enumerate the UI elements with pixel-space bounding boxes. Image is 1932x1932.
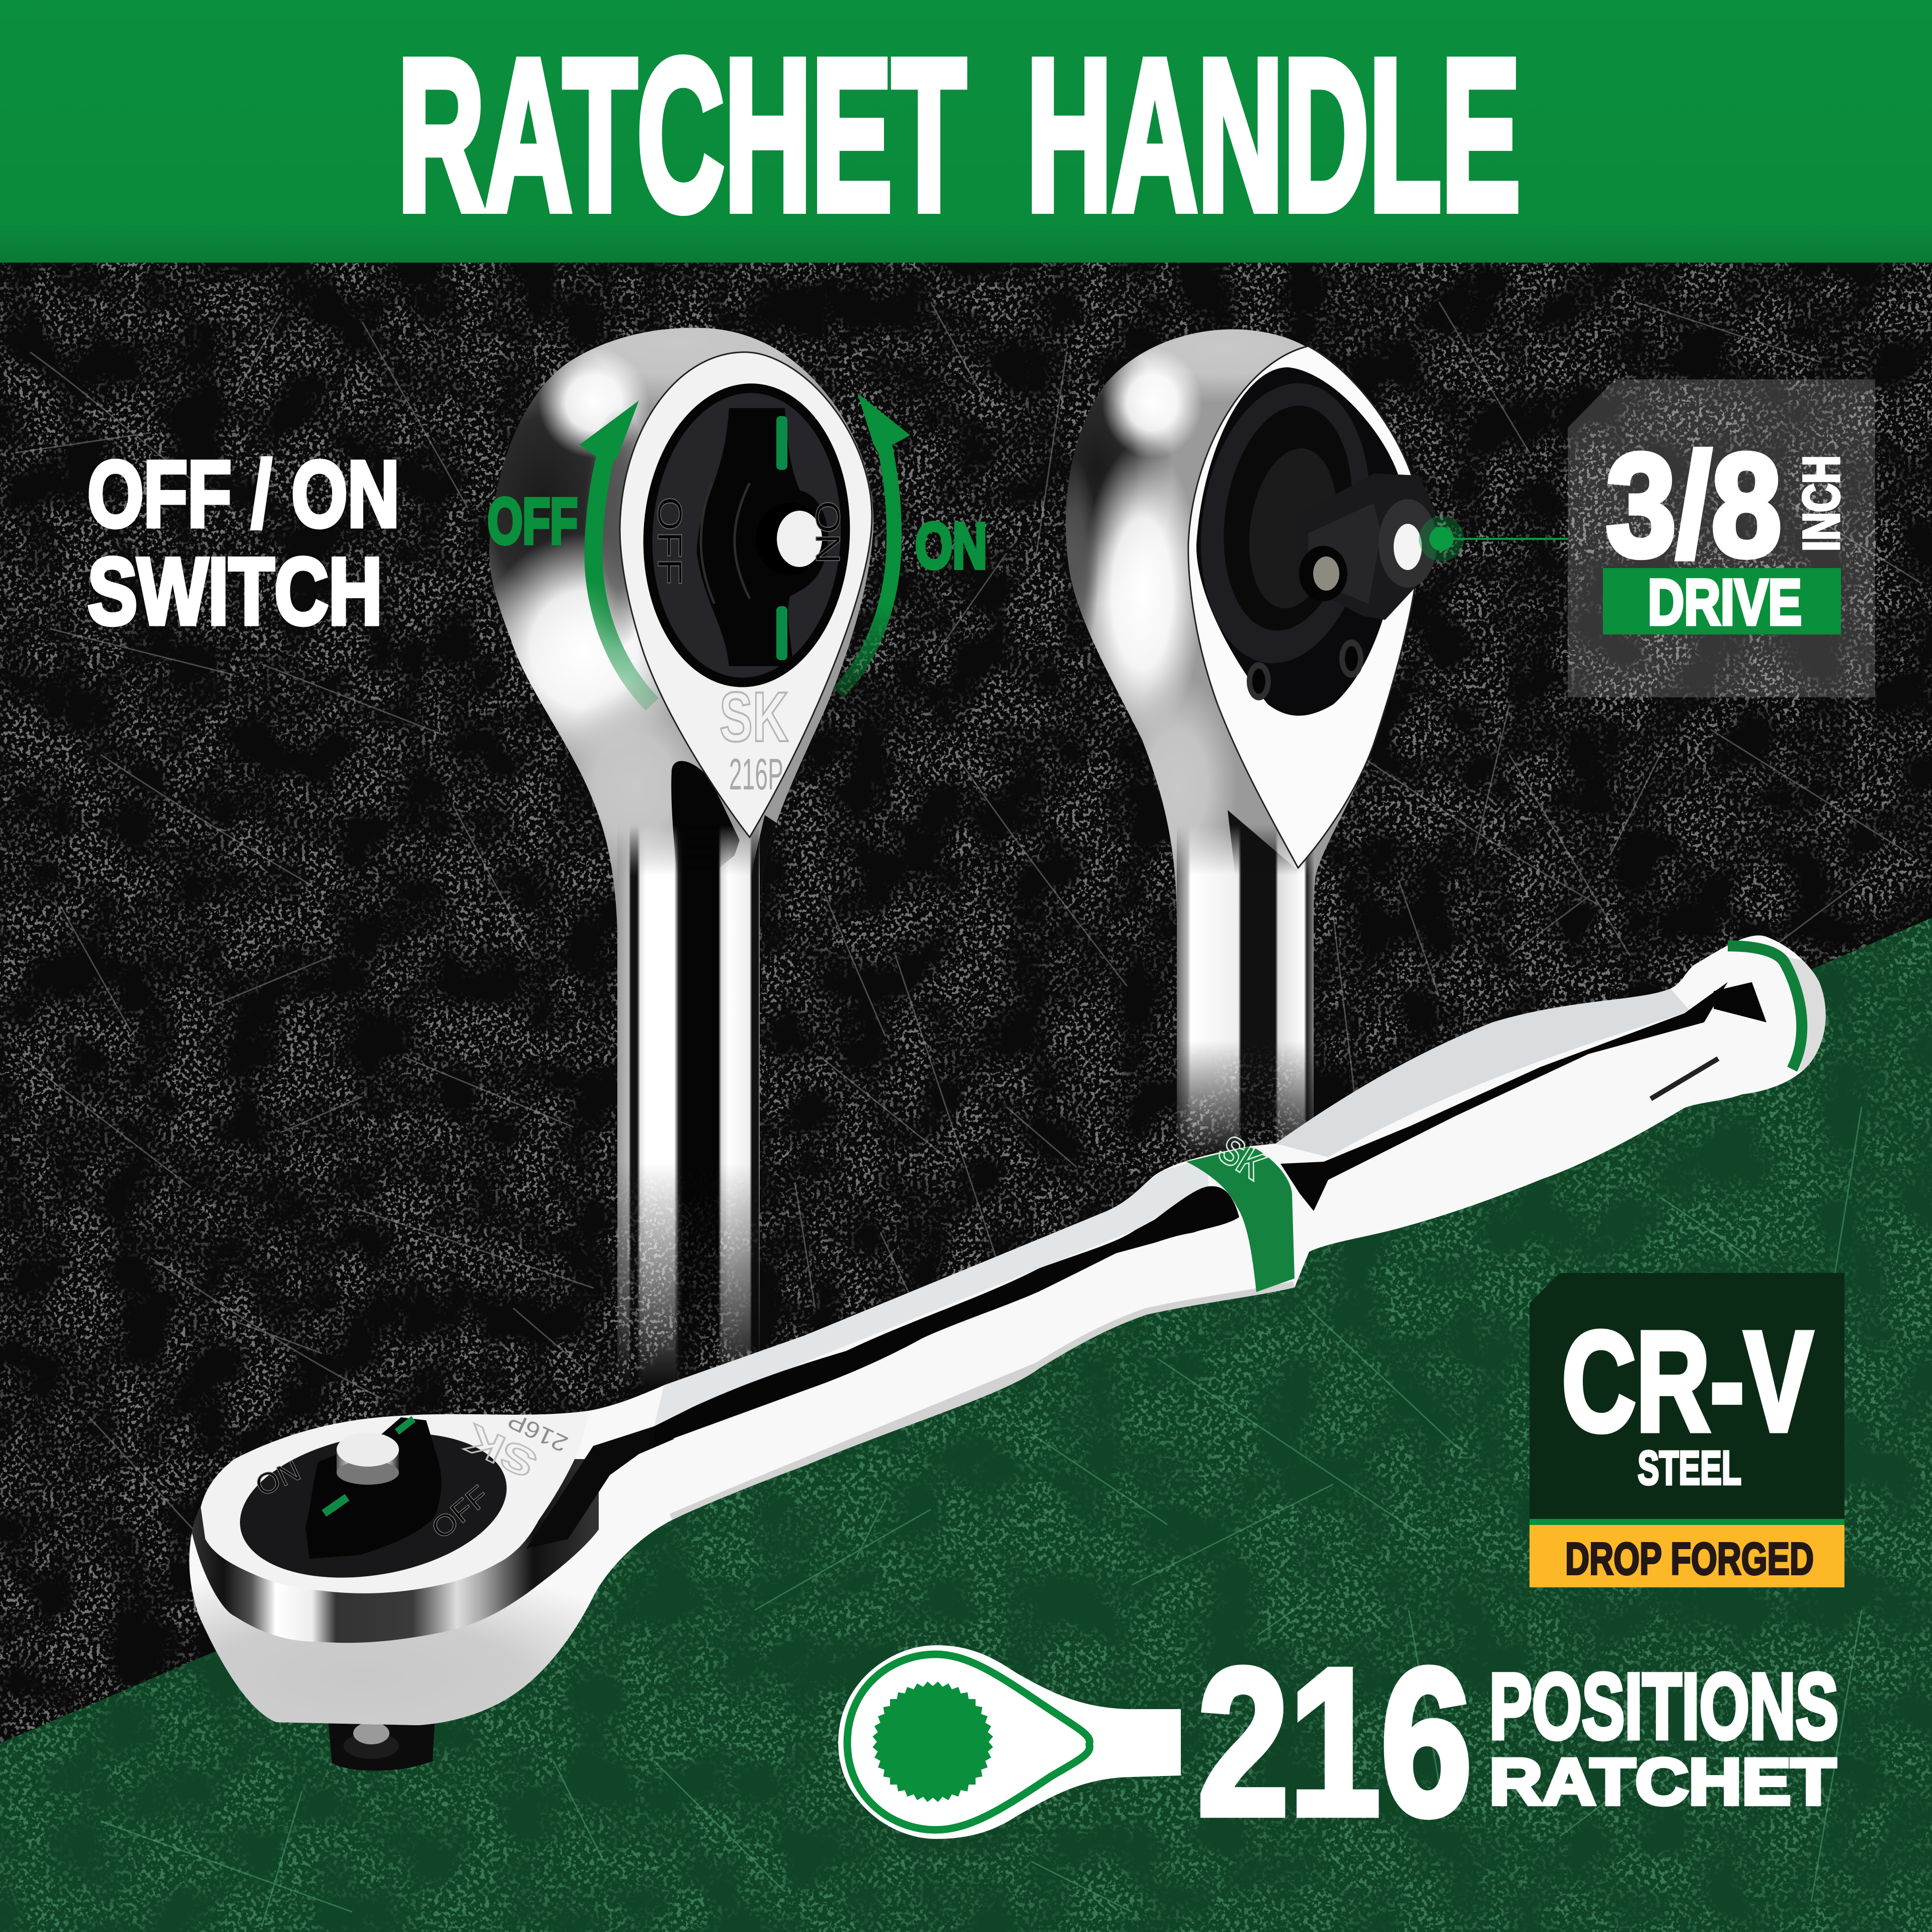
head polished ring bbox=[191, 1459, 599, 1643]
chrome head body bbox=[1021, 292, 1429, 936]
engraved SK logo: SK bbox=[719, 677, 788, 756]
dark scratched background bbox=[0, 263, 1932, 1743]
dial label OFF: OFF bbox=[425, 1479, 495, 1546]
dial label ON: ON bbox=[251, 1454, 305, 1503]
title: RATCHET bbox=[397, 15, 966, 255]
unit: INCH bbox=[1793, 455, 1850, 551]
heading: off / on switch: OFF / ON bbox=[88, 442, 399, 546]
black dial bbox=[228, 1414, 518, 1597]
size value: 3/8 bbox=[1606, 424, 1782, 587]
drop forged text: DROP FORGED bbox=[1565, 1534, 1814, 1584]
label: OFF: OFF bbox=[488, 486, 578, 557]
green grip band bbox=[1186, 1126, 1295, 1292]
shaft top light strip bbox=[654, 1157, 1209, 1426]
white rim face bbox=[1188, 346, 1420, 868]
teardrop face bbox=[620, 352, 872, 837]
ratchet head: back view with square drive bbox=[1021, 292, 1437, 1157]
panel: CR-V steel bbox=[1530, 1273, 1844, 1587]
end pin bbox=[1394, 524, 1422, 570]
lever bbox=[305, 1417, 441, 1559]
button bbox=[337, 1432, 399, 1485]
shaft lower edge shade bbox=[672, 1287, 1295, 1520]
CR-V text: CR-V bbox=[1562, 1302, 1813, 1461]
square drive bbox=[1293, 473, 1437, 620]
ratchet head: front view with switch bbox=[438, 277, 891, 1389]
switch green marks bbox=[776, 416, 787, 470]
heading: off / on switch: SWITCH bbox=[88, 538, 382, 644]
heading: off / on switch bbox=[88, 442, 399, 644]
handle upper light zone bbox=[1275, 989, 1691, 1157]
switch lever bbox=[697, 408, 828, 666]
title: HANDLE bbox=[1026, 15, 1520, 255]
fading shaft of front view bbox=[617, 825, 760, 1389]
neck dark reflection bbox=[526, 1426, 674, 1549]
drive bar bbox=[1603, 568, 1841, 634]
label: ratchet: RATCHET bbox=[1489, 1745, 1836, 1818]
STEEL text: STEEL bbox=[1638, 1441, 1741, 1495]
arrow: off direction bbox=[580, 400, 652, 704]
chrome body bbox=[50, 926, 1841, 1786]
bolt holes bbox=[1247, 639, 1363, 700]
button bbox=[756, 503, 824, 575]
header band bbox=[0, 0, 1932, 263]
panel: 3/8 inch drive bbox=[1568, 379, 1875, 697]
dial bbox=[635, 378, 858, 692]
shaft long black reflection bbox=[654, 1186, 1239, 1445]
stat: 216: 216 bbox=[1197, 1625, 1472, 1859]
neck black reflection bbox=[671, 761, 740, 873]
engraved model number: 216P bbox=[504, 1407, 572, 1458]
detent ball bbox=[1299, 546, 1347, 601]
green grip band: SK bbox=[1211, 1126, 1273, 1188]
drive text: DRIVE bbox=[1648, 567, 1802, 638]
yellow bar bbox=[1530, 1525, 1844, 1587]
green rule bbox=[1530, 1519, 1844, 1525]
knob lower shade bbox=[1651, 1059, 1718, 1099]
engraved logo: SK bbox=[458, 1415, 543, 1487]
black housing bbox=[1196, 367, 1404, 715]
icon: ratchet head with gear bbox=[838, 1645, 1181, 1839]
gear bbox=[872, 1681, 993, 1802]
engraved model number: 216P bbox=[729, 749, 783, 799]
square drive under head bbox=[328, 1721, 435, 1770]
fading shaft of back view bbox=[1177, 825, 1314, 1157]
green end ring bbox=[1728, 946, 1802, 1069]
large ratchet: angled full view bbox=[50, 926, 1841, 1786]
handle long dark reflection bbox=[1280, 982, 1728, 1211]
3/8 inch drive callout leader bbox=[1419, 516, 1568, 561]
label: ON: ON bbox=[915, 510, 987, 582]
knob black wedge bbox=[1714, 982, 1766, 1022]
dial label ON: ON bbox=[809, 501, 847, 564]
arrow: on direction bbox=[838, 393, 910, 693]
green scratched diagonal panel bbox=[0, 906, 1932, 1932]
head top face bbox=[201, 1411, 589, 1593]
chrome head body bbox=[489, 328, 873, 930]
dial label OFF: OFF bbox=[651, 497, 689, 585]
